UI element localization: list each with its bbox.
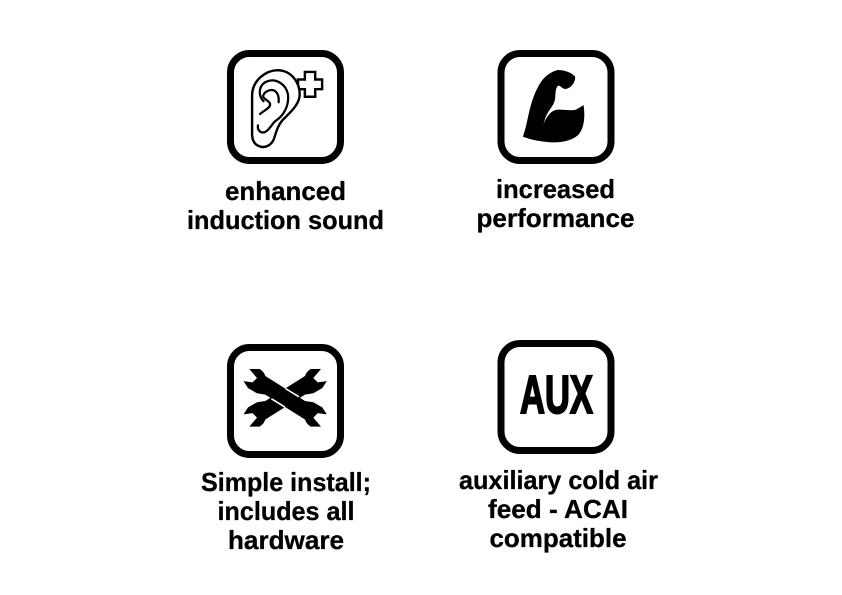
- caption: enhanced: [225, 176, 346, 206]
- panel: increased performance: [476, 54, 634, 233]
- panel: auxiliary cold air feed: [459, 344, 658, 553]
- icon frame: muscle: [501, 54, 611, 160]
- icon: crossed wrenches: [244, 369, 327, 427]
- caption line 2: feed - ACAI: [488, 494, 628, 524]
- panel: enhanced induction sound: [187, 54, 384, 235]
- caption line 2: performance: [476, 203, 634, 233]
- icon: ear with plus: [252, 70, 322, 147]
- caption: Simple install;: [201, 467, 371, 497]
- caption: increased: [496, 174, 615, 204]
- icon frame: ear: [230, 54, 340, 160]
- panel: simple install: [201, 348, 371, 555]
- caption line 2: includes all: [218, 496, 354, 526]
- icon frame: AUX: [501, 344, 611, 450]
- caption: auxiliary cold air: [459, 465, 658, 495]
- icon: flexed arm: [523, 70, 584, 142]
- caption line 3: hardware: [228, 525, 344, 555]
- caption line 3: compatible: [490, 523, 626, 553]
- icon: AUX label: AUX: [520, 364, 593, 425]
- icon frame: wrenches: [230, 348, 340, 454]
- caption line 2: induction sound: [187, 205, 384, 235]
